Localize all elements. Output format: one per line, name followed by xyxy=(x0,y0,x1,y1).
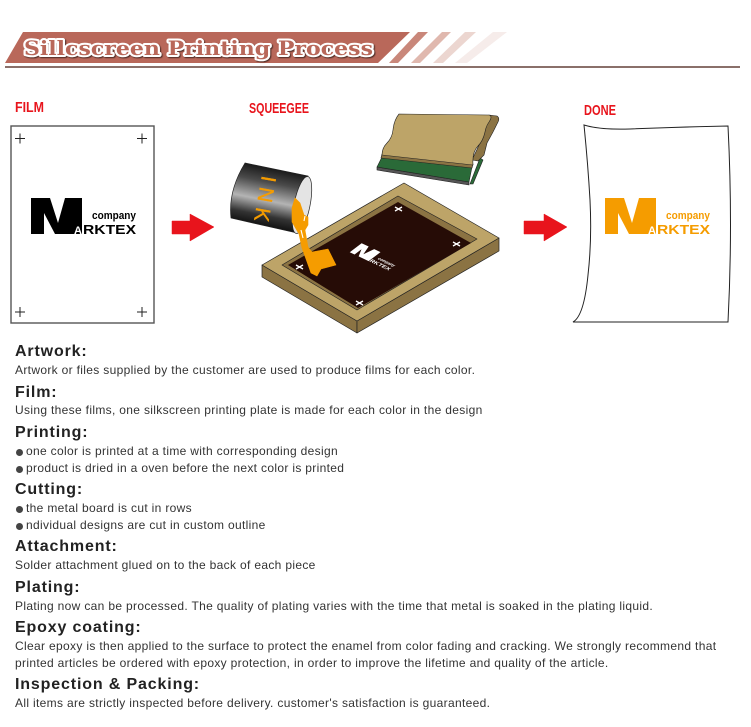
heading: artwork: Artwork: xyxy=(15,343,88,360)
text: inspection and packing: All items are strictly inspected before delivery. customer's satisfaction is guaranteed. xyxy=(15,696,490,710)
film logo: RKTEX xyxy=(83,222,136,237)
text: epoxy coating xyxy=(15,639,716,670)
text: artwork: Artwork or files supplied by the customer are used to produce films for each color. xyxy=(15,363,475,377)
ink can xyxy=(231,163,316,235)
done logo: A xyxy=(648,225,656,237)
text: printing step 2: product is dried in a oven before the next color is printed xyxy=(26,461,344,475)
text: attachment: Solder attachment glued on to the back of each piece xyxy=(15,558,316,572)
film sheet xyxy=(11,126,154,323)
heading: printing: Printing: xyxy=(15,424,88,441)
title: Sillcscreen Printing Process xyxy=(24,36,373,60)
text: epoxy coating: Clear epoxy is then applied to the surface to protect the enamel from color fading and cracking. We strongly recommend that xyxy=(15,639,716,653)
text: plating: Plating now can be processed. The quality of plating varies with the time that metal is soaked in the plating liquid. xyxy=(15,599,653,613)
film logo xyxy=(31,198,137,237)
done logo: RKTEX xyxy=(657,222,710,237)
heading: film: Film: xyxy=(15,384,57,401)
squeegee tool xyxy=(377,114,499,185)
done sheet xyxy=(573,125,730,322)
printing screen frame xyxy=(262,183,499,333)
film logo: A xyxy=(74,225,82,237)
text: printing step 1: one color is printed at a time with corresponding design xyxy=(26,444,338,458)
label: film: FILM xyxy=(15,99,44,116)
text: epoxy coating: printed articles be ordered with epoxy protection, in order to improve the lifetime and quality of the article. xyxy=(15,656,609,670)
arrow: film to squeegee xyxy=(172,214,214,241)
screen logo xyxy=(348,243,401,272)
heading: plating: Plating: xyxy=(15,579,80,596)
film logo: company xyxy=(92,210,137,222)
text: cutting step 1: the metal board is cut in rows xyxy=(26,501,192,515)
screen logo: RKTEX xyxy=(367,259,392,272)
arrow: squeegee to done xyxy=(524,214,567,241)
screen logo: company xyxy=(376,257,397,268)
done logo xyxy=(605,198,711,237)
title banner xyxy=(5,32,740,68)
text: film: Using these films, one silkscreen printing plate is made for each color in the design xyxy=(15,403,483,417)
heading: inspection and packing: Inspection & Packing: xyxy=(15,676,200,693)
pouring ink xyxy=(292,198,336,276)
registration marks on screen xyxy=(296,207,460,305)
label: done: DONE xyxy=(584,102,616,119)
text: cutting step 2: ndividual designs are cut in custom outline xyxy=(26,518,266,532)
heading: attachment: Attachment: xyxy=(15,538,118,555)
screen mesh xyxy=(288,202,471,308)
heading: epoxy coating: Epoxy coating: xyxy=(15,619,142,636)
ink label: INK xyxy=(249,174,280,223)
done logo: company xyxy=(666,210,711,222)
label: squeegee: SQUEEGEE xyxy=(249,100,309,117)
heading: cutting: Cutting: xyxy=(15,481,83,498)
